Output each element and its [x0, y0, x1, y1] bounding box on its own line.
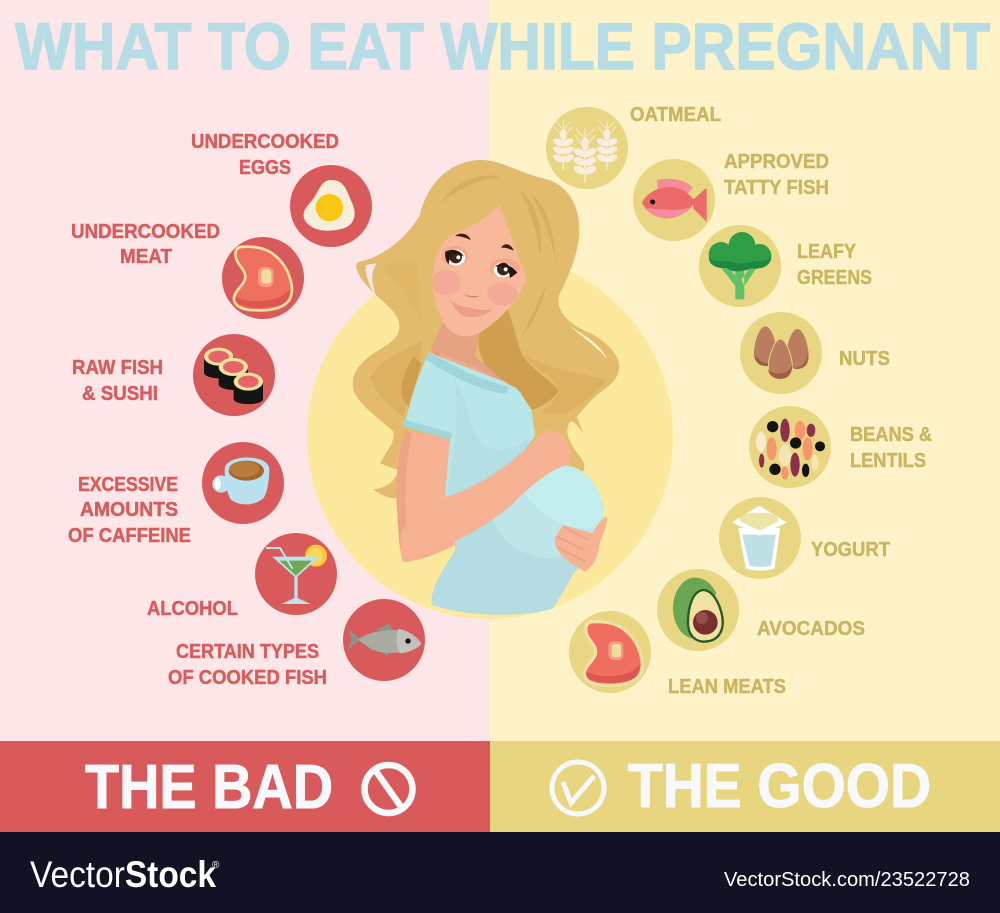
- label: excessive caffeine: AMOUNTS: [80, 499, 178, 521]
- label: undercooked eggs: EGGS: [239, 157, 291, 179]
- label: oatmeal: OATMEAL: [630, 104, 721, 126]
- icon: undercooked egg: [290, 165, 372, 247]
- icon: nuts: [740, 312, 822, 394]
- panel: bad side background: [0, 0, 490, 741]
- lower hand: [555, 517, 607, 572]
- label: beans and lentils: [850, 424, 932, 472]
- label: beans and lentils: LENTILS: [850, 450, 926, 472]
- footer logo: VectorStock: [30, 854, 216, 895]
- label: approved fatty fish: TATTY FISH: [724, 177, 829, 199]
- icon: pink fish: [633, 159, 715, 241]
- nose and mouth: [463, 293, 479, 298]
- label: leafy greens: GREENS: [797, 267, 872, 289]
- label: certain types of cooked fish: [168, 641, 327, 689]
- label: certain types of cooked fish: CERTAIN TYPES: [176, 641, 319, 663]
- icon: undercooked meat: [222, 237, 304, 319]
- label: approved fatty fish: [724, 151, 829, 199]
- central yellow circle: [307, 253, 673, 619]
- icon: avocado: [657, 569, 739, 651]
- label: raw fish and sushi: [72, 357, 163, 405]
- footer bar: [0, 832, 1000, 913]
- label: excessive caffeine: EXCESSIVE: [78, 474, 178, 496]
- registered mark: ®: [212, 860, 220, 871]
- belly: [492, 466, 603, 558]
- icon: prohibition sign: [364, 765, 412, 813]
- label: approved fatty fish: APPROVED: [724, 151, 829, 173]
- banner: the good: [490, 741, 1000, 832]
- eye right: [494, 262, 512, 278]
- label: raw fish and sushi: RAW FISH: [72, 357, 163, 379]
- illustration: pregnant woman: [353, 160, 619, 615]
- label: certain types of cooked fish: OF COOKED FISH: [168, 667, 327, 689]
- label: excessive caffeine: OF CAFFEINE: [68, 525, 191, 547]
- eye left: [447, 250, 465, 266]
- label: undercooked eggs: [191, 131, 339, 179]
- banner text: the bad: THE BAD: [85, 753, 333, 822]
- eyebrows: [455, 234, 514, 251]
- label: lean meats: LEAN MEATS: [668, 676, 786, 698]
- panel: good side background: [490, 0, 1000, 741]
- label: alcohol: ALCOHOL: [147, 598, 238, 620]
- bad foods list: [68, 131, 425, 689]
- hair fringe right: [500, 172, 579, 350]
- face: [432, 203, 527, 336]
- label: avocados: AVOCADOS: [757, 618, 865, 640]
- icon: check mark circle: [552, 762, 604, 814]
- label: raw fish and sushi: & SUSHI: [82, 383, 158, 405]
- icon: lean meat: [569, 611, 651, 693]
- banner: the bad: [0, 741, 490, 832]
- label: nuts: NUTS: [839, 348, 890, 370]
- banner text: the good: THE GOOD: [628, 752, 931, 821]
- footer image id: VectorStock.com/23522728: [724, 869, 970, 891]
- t-shirt: [404, 353, 535, 497]
- icon: beans and lentils: [749, 406, 831, 488]
- far arm: [396, 430, 571, 562]
- front arm over belly: [400, 430, 571, 562]
- icon: yogurt: [719, 497, 801, 579]
- icon: grey cooked fish: [343, 599, 425, 681]
- label: undercooked meat: [71, 221, 220, 268]
- label: leafy greens: LEAFY: [797, 241, 857, 263]
- chest: [438, 354, 500, 387]
- icon: coffee cup: [202, 442, 284, 524]
- neck: [431, 323, 507, 387]
- label: undercooked meat: MEAT: [120, 246, 172, 268]
- label: excessive caffeine: [68, 474, 191, 547]
- icon: broccoli: [699, 225, 781, 307]
- hair fringe left: [418, 160, 507, 278]
- label: undercooked eggs: UNDERCOOKED: [191, 131, 339, 153]
- good foods list: [546, 104, 932, 698]
- label: beans and lentils: BEANS &: [850, 424, 932, 446]
- label: yogurt: YOGURT: [811, 539, 890, 561]
- icon: oatmeal wheat: [546, 107, 628, 189]
- icon: cocktail: [255, 533, 337, 615]
- icon: sushi rolls: [193, 334, 275, 416]
- label: leafy greens: [797, 241, 872, 289]
- label: undercooked meat: UNDERCOOKED: [71, 221, 220, 243]
